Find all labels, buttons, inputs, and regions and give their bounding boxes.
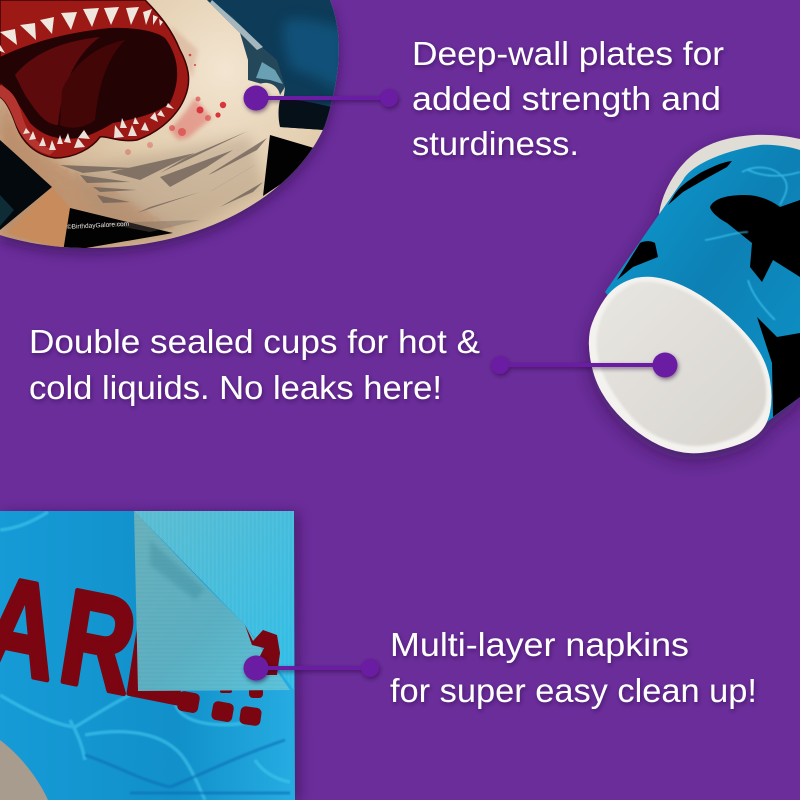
shark silhouettes	[617, 161, 800, 417]
text: plate: Deep-wall plates for	[412, 35, 724, 72]
text: napkin: Multi-layer napkins	[390, 626, 689, 663]
dark shapes around the body	[263, 135, 314, 196]
text: plate	[412, 35, 724, 162]
ellipsis marks	[176, 687, 263, 726]
cup rim	[659, 135, 800, 215]
cup	[589, 135, 800, 453]
plate: shark face	[0, 0, 345, 254]
gill slashes	[60, 131, 267, 232]
word on napkin: L	[117, 574, 199, 732]
callout: napkin	[244, 626, 757, 709]
callout: cup	[29, 323, 678, 406]
connector: cup	[491, 352, 678, 378]
torn red mark	[245, 625, 280, 675]
shark body corner	[0, 740, 48, 800]
dark blue shark back	[207, 0, 345, 130]
water caustics	[705, 167, 800, 320]
text: plate: sturdiness.	[412, 125, 579, 162]
text: napkin	[390, 626, 757, 709]
water ripples	[0, 512, 290, 800]
text: cup	[29, 323, 480, 406]
text: cup: cold liquids. No leaks here!	[29, 369, 442, 406]
word on napkin: R	[51, 562, 145, 723]
watermark: ©BirthdayGalore.com	[67, 220, 129, 231]
cup base	[589, 277, 772, 453]
grunge texture	[3, 104, 174, 248]
cup body	[605, 145, 800, 425]
connector: plate	[244, 86, 398, 110]
callout: plate	[244, 35, 724, 162]
throat	[0, 28, 177, 139]
lower teeth	[23, 103, 174, 150]
text: plate: added strength and	[412, 80, 721, 117]
tongue edge	[0, 85, 55, 155]
mouth	[0, 0, 189, 158]
connector: napkin	[244, 656, 379, 680]
text: napkin: for super easy clean up!	[390, 672, 757, 709]
upper teeth	[0, 7, 163, 53]
word on napkin	[0, 578, 181, 706]
lower-left brown staining	[0, 100, 175, 250]
napkin	[0, 511, 299, 800]
folded corner underside	[134, 511, 294, 690]
blood splatter	[125, 54, 226, 155]
text: cup: Double sealed cups for hot &	[29, 323, 480, 360]
